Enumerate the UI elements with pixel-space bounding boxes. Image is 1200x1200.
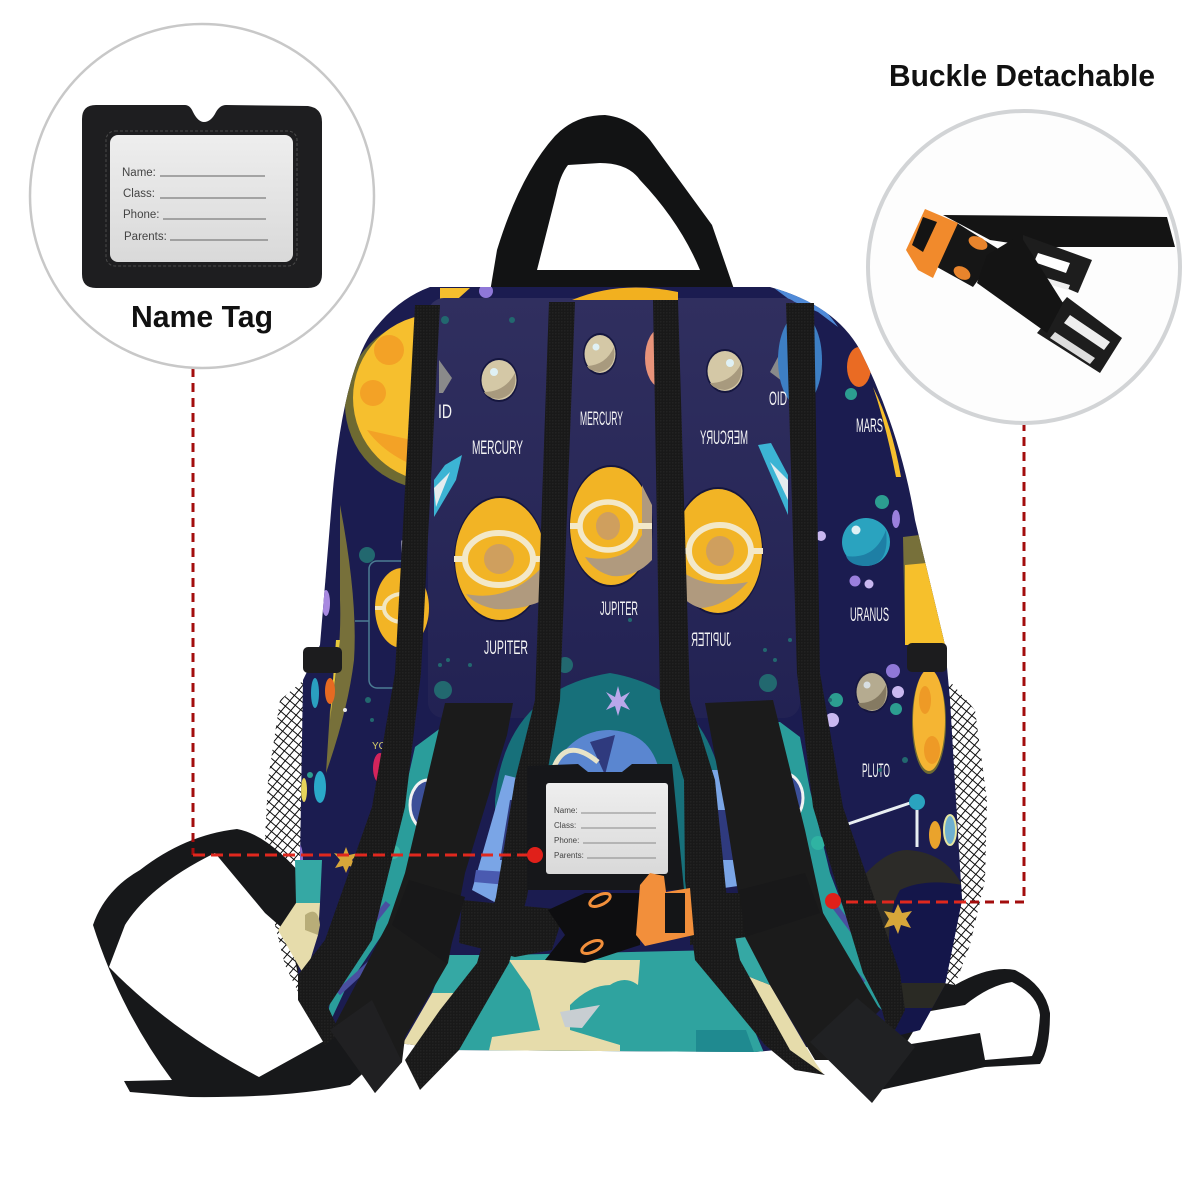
panel: name tag circle (30, 24, 374, 368)
shoulder strap right (705, 700, 880, 1060)
info box with planet (355, 561, 429, 688)
teal segment left (325, 727, 470, 1033)
backpack body: URANUS (850, 605, 889, 626)
purple star (606, 686, 630, 716)
small tag text (554, 806, 584, 860)
yellow edge of olive planet (330, 640, 340, 719)
mesh pocket: right (935, 670, 987, 985)
strap: outer right (786, 303, 905, 1040)
left adjustable strap loop (93, 829, 400, 1097)
name tag fields: Class: (123, 188, 155, 200)
pocket band left (303, 647, 342, 673)
label: Jupiter right mirrored: JUPITER (691, 630, 731, 651)
navy lower right (855, 880, 975, 1040)
rocket shape right (758, 443, 788, 515)
teal star left (386, 845, 400, 859)
name tag fields: Name: (122, 167, 156, 179)
purple stripes left (338, 903, 388, 993)
blue top-right shape (774, 288, 838, 327)
shadowed side strap hump (860, 850, 962, 975)
top shoulder prints (440, 287, 493, 298)
small name tag on backpack (527, 764, 684, 890)
callout line: name tag (193, 368, 543, 863)
gold star lower left (334, 847, 358, 873)
label fragments: ID (438, 402, 452, 423)
chest strap right (690, 893, 746, 945)
buckle webbing (977, 235, 1063, 333)
backpack body: MARS (856, 416, 883, 437)
coral and blue planets (645, 332, 654, 385)
buckle orange tip (906, 209, 990, 283)
small tag text: Parents: (554, 851, 584, 860)
purple stripes right (830, 900, 863, 983)
olive ringed planet left (326, 505, 355, 773)
teal wedge above lower right cream (715, 935, 770, 985)
planet: Mercury right (706, 349, 744, 393)
small tag text: Name: (554, 806, 578, 815)
planet: Mercury left (480, 358, 518, 402)
strap: inner left (405, 302, 575, 1090)
small tag text: Phone: (554, 836, 579, 845)
small tag text: Class: (554, 821, 576, 830)
back padding panel (428, 298, 800, 718)
label: Mercury left: MERCURY (472, 438, 523, 459)
rocket shape left (434, 455, 462, 517)
name tag fields: Parents: (124, 231, 167, 243)
name tag fields: Phone: (123, 209, 159, 221)
right window (763, 773, 803, 823)
heading: Buckle Detachable: Buckle Detachable (889, 58, 1155, 93)
callout line: buckle (825, 422, 1024, 909)
grey iceberg (560, 1005, 600, 1028)
lower side strap band (895, 983, 965, 1008)
chest adjuster left (392, 880, 465, 963)
small tag lines (581, 813, 656, 858)
planet: Mercury center (583, 333, 617, 375)
small moons on right side (929, 815, 956, 849)
backpack body: OID (769, 389, 787, 410)
teal wedge lower left (432, 955, 482, 993)
planet: Mars orange (847, 347, 871, 387)
strap: inner right (653, 300, 825, 1075)
name tag holder (82, 105, 322, 288)
buckle body black (937, 223, 1000, 287)
cream wedge lower left (402, 993, 462, 1055)
left strap adjuster buckle (330, 1000, 402, 1093)
asteroids (439, 356, 780, 393)
backpack body: JUPITER (600, 599, 638, 620)
label: Jupiter left: JUPITER (484, 638, 528, 659)
olive and yellow planet right (903, 535, 945, 645)
pocket band right (907, 643, 947, 672)
gold star lower right (884, 904, 912, 934)
teal lower centre (450, 950, 765, 1055)
constellation lines (845, 794, 925, 977)
small left planets (300, 678, 382, 860)
heading: Name Tag: Name Tag (131, 299, 273, 334)
right adjustable strap loop (860, 969, 1050, 1092)
backpack body (290, 264, 980, 1060)
pale planet left edge (325, 575, 326, 583)
chest adjuster right (739, 873, 820, 937)
blue dome (552, 730, 659, 800)
chest buckle orange (580, 873, 694, 956)
strap: outer left (298, 305, 440, 1045)
light blue tower left (472, 775, 525, 905)
orange textured sun on side (912, 669, 946, 774)
dark teal block bottom (696, 1030, 755, 1055)
name tag lines (160, 176, 268, 240)
planet: Jupiter left (454, 496, 546, 622)
light blue tower right (695, 770, 745, 890)
small teal moon (845, 388, 857, 400)
backpack body: MERCURY (580, 409, 623, 430)
yellow planet edge right (873, 387, 901, 477)
cream wedge lower right (745, 975, 824, 1075)
teal star right (811, 836, 825, 850)
upper clip (1023, 235, 1092, 293)
label fragment P: P (400, 538, 413, 559)
label: Mercury right mirrored: MERCURY (700, 428, 748, 449)
teal segment right (760, 722, 882, 1010)
navy body fabric (290, 270, 980, 1060)
purple moons left (322, 590, 330, 616)
planet: Jupiter right (684, 487, 763, 615)
name tag fields (122, 167, 167, 243)
chest buckle black (545, 893, 640, 963)
planet: Pluto with moons (825, 664, 904, 727)
planet: Jupiter center (569, 465, 653, 587)
top edge Jupiter label: JUPITER (619, 264, 661, 275)
stars and dots background (359, 316, 908, 813)
lower clip (1037, 297, 1122, 373)
top planet sliver (572, 288, 678, 300)
fragment text: YOU R (372, 741, 404, 752)
dark teal dome (495, 673, 725, 890)
carry handle (490, 115, 735, 292)
panel: buckle circle (868, 111, 1180, 423)
right strap adjuster buckle (810, 998, 915, 1103)
backpack body: PLUTO (862, 761, 890, 782)
cream continent lower (488, 960, 640, 1055)
planet: Uranus with moons (816, 495, 900, 588)
chest strap left (459, 900, 565, 957)
left window (410, 780, 446, 830)
mesh pocket: left (265, 675, 312, 1000)
teal and cream cut at left edge (278, 860, 322, 977)
detached strap (943, 215, 1175, 247)
shoulder strap left (332, 703, 513, 1093)
large yellow planet left (345, 317, 414, 486)
